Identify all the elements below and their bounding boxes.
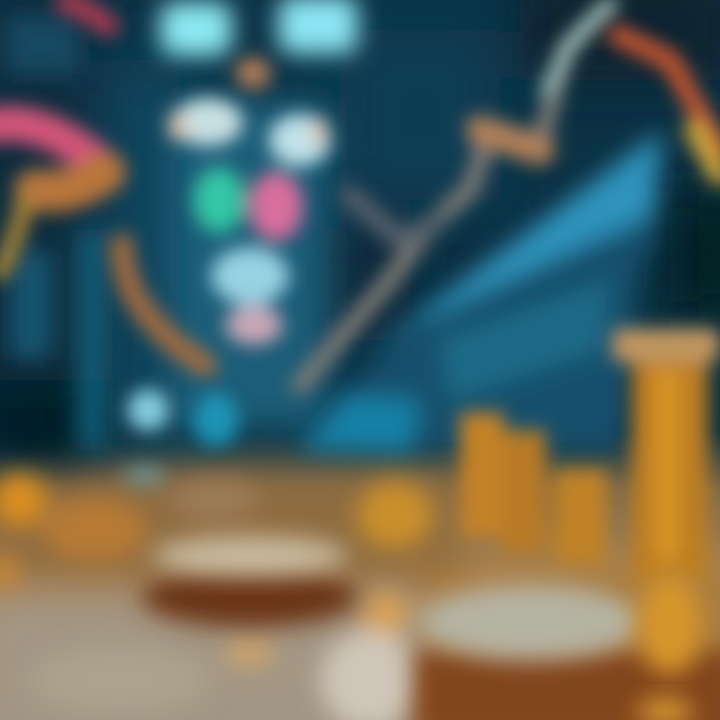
- bowl: centre: [142, 536, 358, 627]
- left pink and orange ribbon: [0, 2, 205, 365]
- gold coin stacks: [460, 328, 720, 580]
- red and orange line top right: [618, 35, 720, 175]
- centre chart blobs: [123, 57, 331, 498]
- gold coin glows: [0, 474, 433, 720]
- rising line chart: [300, 5, 610, 385]
- dark upper backdrop: [0, 0, 720, 480]
- blue rising triangle: [300, 130, 662, 455]
- table surface: [0, 480, 720, 720]
- light panels at top: [160, 0, 358, 56]
- centre column: [170, 100, 330, 430]
- left column highlights: [5, 15, 104, 450]
- bowl: right foreground: [415, 575, 720, 720]
